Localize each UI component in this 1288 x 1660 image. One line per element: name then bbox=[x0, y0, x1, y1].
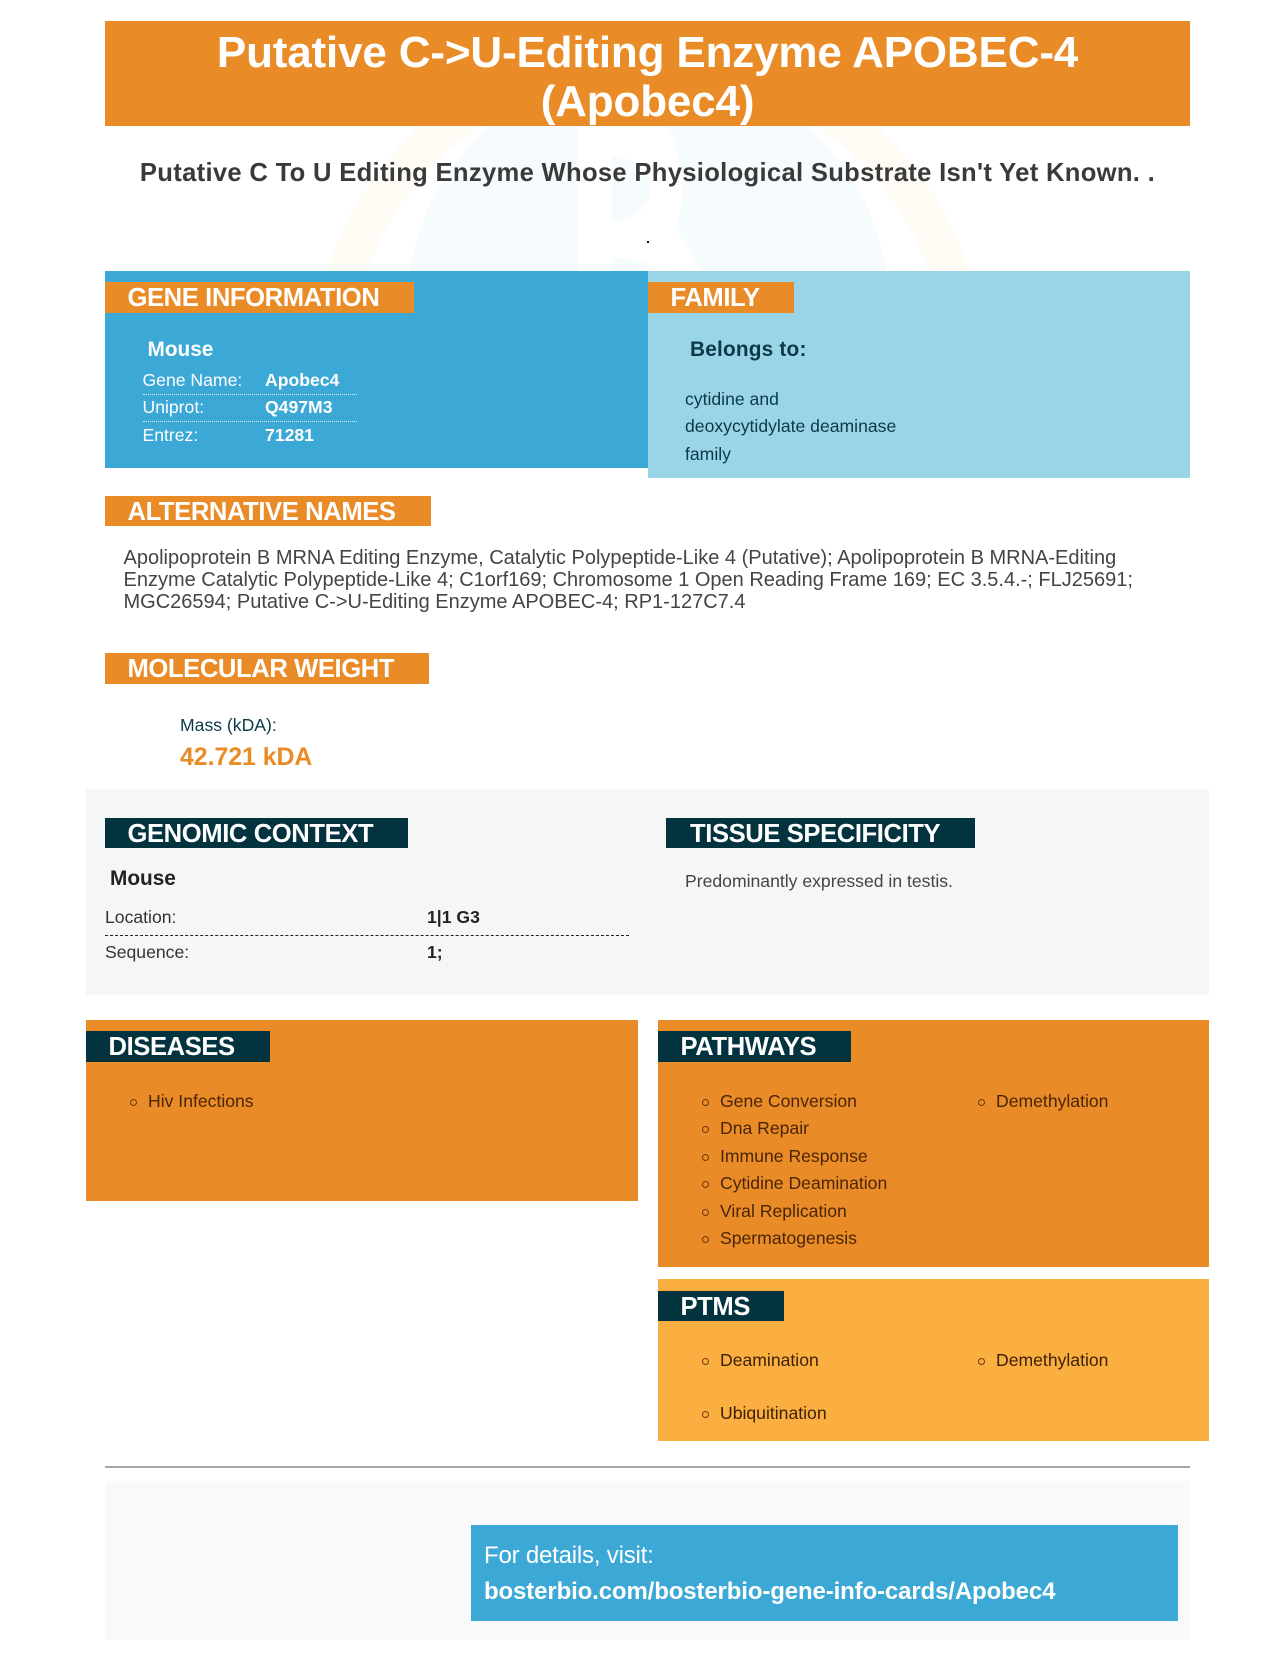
pathways list column 1: Gene Conversion bbox=[720, 1090, 857, 1110]
pathways list column 1: Spermatogenesis bbox=[720, 1228, 857, 1248]
panel: diseases bbox=[86, 1020, 638, 1201]
panel: pathways bbox=[658, 1020, 1209, 1267]
callout url: bosterbio.com/bosterbio-gene-info-cards/Apobec4 bbox=[484, 1578, 1055, 1605]
panel: genomic context and tissue specificity bbox=[86, 789, 1209, 995]
heading: family: FAMILY bbox=[670, 284, 760, 312]
uniprot row: Q497M3 bbox=[265, 397, 332, 417]
subtitle: Putative C To U Editing Enzyme Whose Physiological Substrate Isn't Yet Known. . bbox=[140, 158, 1155, 186]
alternative names text: Enzyme Catalytic Polypeptide-Like 4; C1orf169; Chromosome 1 Open Reading Frame 169; EC 3.5.4.-; FLJ25691; bbox=[124, 568, 1133, 590]
gene name row bbox=[143, 368, 357, 395]
sequence row: 1; bbox=[427, 942, 443, 962]
family text: cytidine and bbox=[685, 388, 779, 408]
title banner: (Apobec4) bbox=[541, 77, 754, 126]
panel: ptms bbox=[658, 1279, 1209, 1441]
pathways list column 2: Demethylation bbox=[996, 1090, 1108, 1110]
location row bbox=[105, 905, 629, 936]
pathways list column 1 bbox=[702, 1090, 887, 1248]
panel: gene information bbox=[105, 271, 648, 468]
heading: gene information: GENE INFORMATION bbox=[128, 284, 379, 312]
title banner bbox=[105, 21, 1190, 126]
uniprot row bbox=[143, 395, 357, 422]
family text: family bbox=[685, 444, 731, 464]
pathways list column 1: Immune Response bbox=[720, 1146, 868, 1166]
belongs to label: Belongs to: bbox=[690, 338, 807, 361]
title banner: Putative C->U-Editing Enzyme APOBEC-4 bbox=[217, 28, 1078, 77]
sequence row bbox=[105, 942, 443, 962]
gene name row: Gene Name: bbox=[142, 370, 242, 390]
pathways list column 1: Viral Replication bbox=[720, 1200, 847, 1220]
alternative names text bbox=[124, 546, 1133, 612]
heading: pathways bbox=[658, 1031, 851, 1062]
pathways list column 1: Cytidine Deamination bbox=[720, 1172, 887, 1192]
sequence row: Sequence: bbox=[105, 942, 189, 962]
alternative names text: Apolipoprotein B MRNA Editing Enzyme, Catalytic Polypeptide-Like 4 (Putative); Apolipoprotein B MRNA-Editing bbox=[124, 546, 1116, 568]
small dot bbox=[647, 241, 649, 243]
species label: Mouse bbox=[110, 867, 176, 890]
tissue text: Predominantly expressed in testis. bbox=[685, 871, 953, 891]
uniprot row: Uniprot: bbox=[142, 397, 204, 417]
heading: family bbox=[648, 282, 794, 313]
ptm item: ubiquitination: Ubiquitination bbox=[720, 1403, 827, 1423]
heading: molecular weight: MOLECULAR WEIGHT bbox=[128, 655, 394, 683]
entrez row bbox=[142, 424, 314, 444]
location row: 1|1 G3 bbox=[427, 907, 480, 927]
heading: pathways: PATHWAYS bbox=[680, 1033, 816, 1061]
heading: tissue specificity: TISSUE SPECIFICITY bbox=[690, 820, 940, 848]
callout label: For details, visit: bbox=[484, 1542, 654, 1569]
heading: ptms: PTMS bbox=[680, 1293, 750, 1321]
heading: diseases: DISEASES bbox=[108, 1033, 235, 1061]
disease item: Hiv Infections bbox=[148, 1090, 254, 1110]
species label: Mouse bbox=[148, 338, 213, 361]
entrez row: 71281 bbox=[265, 424, 314, 444]
mass label: Mass (kDA): bbox=[180, 715, 277, 735]
mass value: 42.721 kDA bbox=[180, 744, 312, 771]
ptm item: deamination: Deamination bbox=[720, 1350, 819, 1370]
family text: deoxycytidylate deaminase bbox=[685, 416, 896, 436]
heading: genomic context: GENOMIC CONTEXT bbox=[128, 820, 373, 848]
heading: diseases bbox=[86, 1031, 270, 1062]
gene name row: Apobec4 bbox=[265, 370, 339, 390]
family text bbox=[685, 388, 896, 464]
alternative names text: MGC26594; Putative C->U-Editing Enzyme APOBEC-4; RP1-127C7.4 bbox=[124, 590, 745, 612]
heading: alternative names: ALTERNATIVE NAMES bbox=[128, 498, 396, 526]
callout: details link bbox=[471, 1525, 1178, 1621]
location row: Location: bbox=[105, 907, 176, 927]
panel: family bbox=[648, 271, 1190, 478]
entrez row: Entrez: bbox=[142, 424, 198, 444]
ptm item: demethylation: Demethylation bbox=[996, 1350, 1108, 1370]
heading: ptms bbox=[658, 1291, 784, 1321]
pathways list column 1: Dna Repair bbox=[720, 1118, 809, 1138]
panel: footer bbox=[105, 1481, 1190, 1640]
watermark logo bbox=[326, 126, 970, 271]
